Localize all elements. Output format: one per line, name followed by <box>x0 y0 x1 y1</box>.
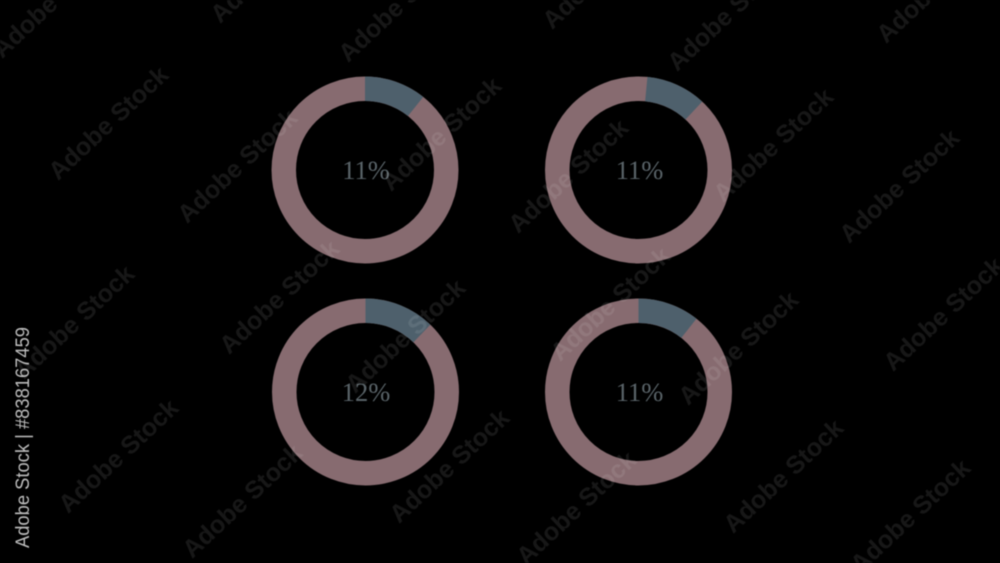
donut chart: top right 11%: 11% <box>616 155 663 185</box>
donut chart: bottom right 11% <box>557 311 720 473</box>
watermarks: Adobe Stock: Adobe Stock <box>376 72 507 196</box>
watermarks: Adobe Stock: Adobe Stock <box>834 124 965 248</box>
watermarks: Adobe Stock: Adobe Stock <box>545 242 676 366</box>
watermarks: Adobe Stock: Adobe Stock <box>340 274 471 398</box>
donut chart: bottom right 11%: 11% <box>616 377 663 407</box>
watermarks: Adobe Stock: Adobe Stock <box>214 235 345 359</box>
watermarks: Adobe Stock: Adobe Stock <box>673 286 804 410</box>
watermarks: Adobe Stock: Adobe Stock <box>9 260 140 384</box>
vertical stock id label: Adobe Stock | #838167459 <box>13 327 34 548</box>
watermarks: Adobe Stock: Adobe Stock <box>53 394 184 518</box>
donut chart: bottom left 12% <box>284 311 447 473</box>
watermarks: Adobe Stock: Adobe Stock <box>718 414 849 538</box>
watermarks: Adobe Stock: Adobe Stock <box>177 439 308 563</box>
watermarks: Adobe Stock: Adobe Stock <box>43 61 174 185</box>
donut chart: top left 11% <box>284 89 446 251</box>
watermarks: Adobe Stock: Adobe Stock <box>503 114 634 238</box>
donut chart: top left 11%: 11% <box>342 155 390 185</box>
watermarks: Adobe Stock: Adobe Stock <box>384 404 515 528</box>
watermarks: Adobe Stock: Adobe Stock <box>172 104 303 228</box>
donut chart: bottom left 12%: 12% <box>342 377 390 407</box>
watermarks: Adobe Stock: Adobe Stock <box>708 83 839 207</box>
donut chart: top right 11% <box>550 81 727 259</box>
